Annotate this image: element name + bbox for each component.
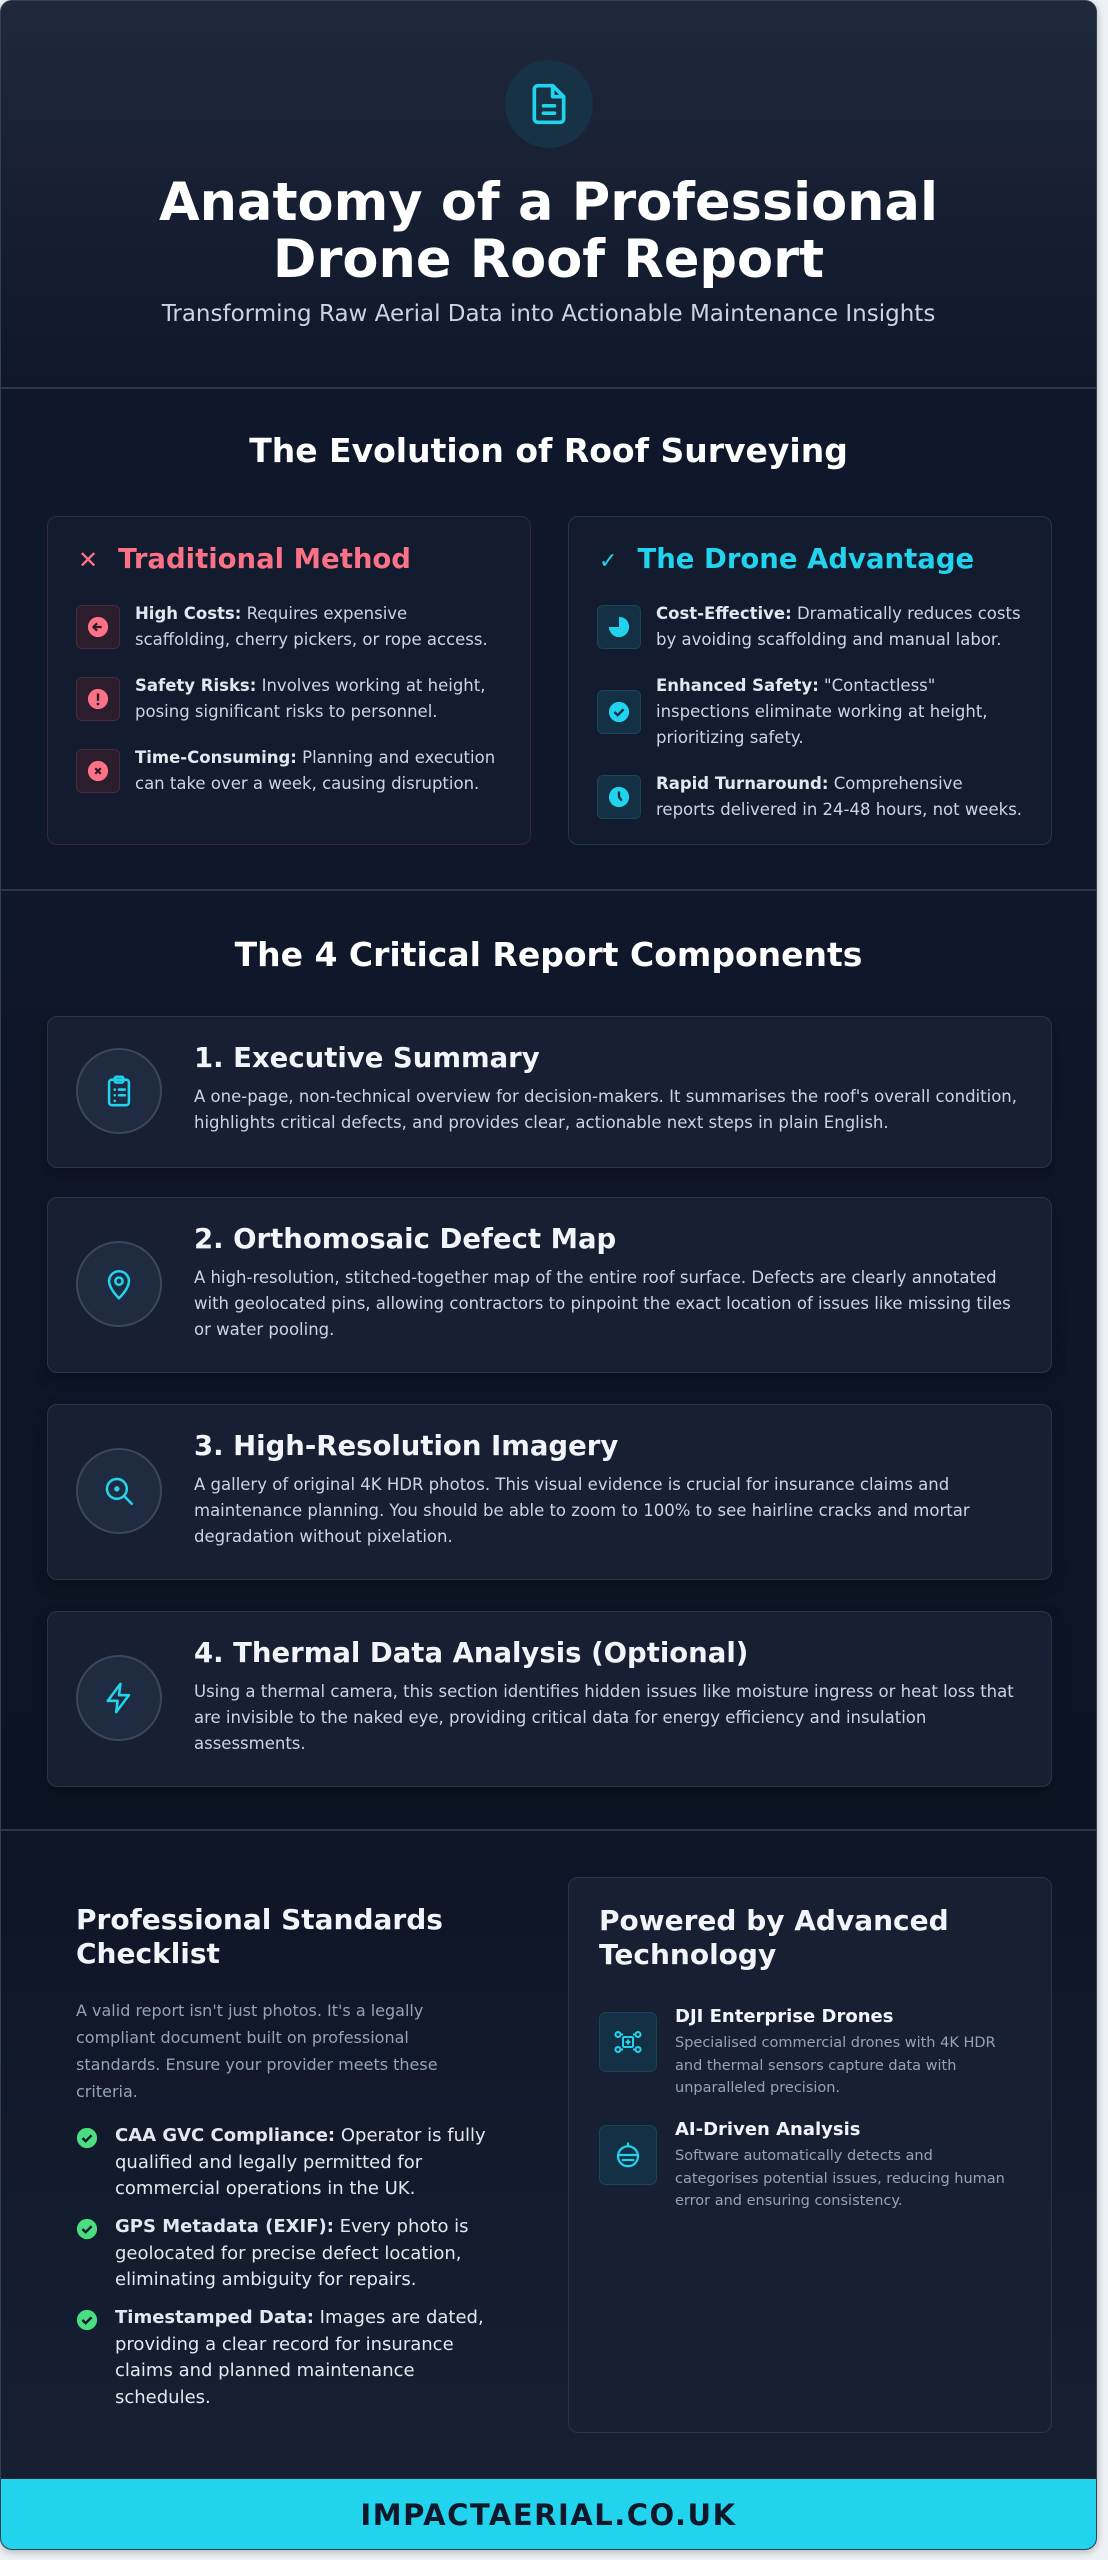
footer [1,2479,1096,2551]
component 3: 3. High-Resolution Imagery [194,1430,618,1462]
item: safety risks: Safety Risks: Involves working at height, posing significant risks to personnel. [135,676,485,721]
component 1 [47,1016,1052,1168]
item: time-consuming: Time-Consuming: Planning and execution can take over a week, causing disruption. [135,748,495,793]
component 3: A gallery of original 4K HDR photos. This visual evidence is crucial for insurance claims and maintenance planning. You should be able to zoom to 100% to see hairline cracks and mortar degradation without pixelation. [194,1475,970,1546]
item: high costs: High Costs: Requires expensive scaffolding, cherry pickers, or rope access. [135,604,488,649]
checklist item 2 [76,2216,469,2290]
item: cost-effective: Cost-Effective: Dramatically reduces costs by avoiding scaffolding and manual labor. [656,604,1021,649]
heading: The 4 Critical Report Components [235,935,862,974]
component 4 [47,1611,1052,1787]
checklist item 3 [76,2307,484,2408]
icon: document [505,60,593,148]
heading: Powered by Advanced Technology [599,1904,949,1971]
component 4: 4. Thermal Data Analysis (Optional) [194,1637,748,1669]
title [159,172,938,290]
component 1: 1. Executive Summary [194,1042,540,1074]
icon: lightning [76,1655,162,1741]
panel: technology: AI-Driven Analysis [675,2119,861,2140]
component 2: A high-resolution, stitched-together map of the entire roof surface. Defects are clearly annotated with geolocated pins, allowing contractors to pinpoint the exact location of issues like missing tiles or water pooling. [194,1268,1011,1339]
panel heading: ✓ The Drone Advantage [599,543,974,575]
icon: clipboard [76,1048,162,1134]
title: Anatomy of a Professional [159,172,938,233]
panel: technology: DJI Enterprise Drones [675,2006,893,2027]
panel: drone advantage [568,516,1052,845]
header [1,1,1096,389]
item: enhanced safety: Enhanced Safety: "Contactless" inspections eliminate working at height, prioritizing safety. [656,676,988,747]
section: standards and technology: CAA GVC Compliance: Operator is fully qualified and legally permitted for commercial operations in the UK. [115,2125,486,2199]
panel heading: ✕ Traditional Method [78,543,411,575]
panel: traditional method [47,516,531,845]
component 1: A one-page, non-technical overview for decision-makers. It summarises the roof's overall condition, highlights critical defects, and provides clear, actionable next steps in plain English. [194,1087,1017,1132]
panel: technology: Software automatically detects and categorises potential issues, reducing human error and ensuring consistency. [675,2148,1005,2209]
section: standards and technology: GPS Metadata (EXIF): Every photo is geolocated for precise defect location, eliminating ambiguity for repairs. [115,2216,469,2290]
panel: technology [568,1877,1052,2433]
component 3 [47,1404,1052,1580]
component 2 [47,1197,1052,1373]
icon: map pin [76,1241,162,1327]
icon: magnifier [76,1448,162,1534]
item: rapid turnaround: Rapid Turnaround: Comprehensive reports delivered in 24-48 hours, not weeks. [656,774,1022,819]
heading: checklist: Professional Standards Checklist [76,1903,443,1970]
section: evolution [1,391,1096,891]
section: standards and technology [1,1833,1096,2479]
component 2: 2. Orthomosaic Defect Map [194,1223,616,1255]
section: components [1,893,1096,1831]
tech item: drones [599,2006,996,2096]
list: drone [597,604,1022,819]
title: Drone Roof Report [273,229,824,290]
checklist item 1 [76,2125,486,2199]
subtitle: Transforming Raw Aerial Data into Actionable Maintenance Insights [162,301,935,327]
intro text: A valid report isn't just photos. It's a legally compliant document built on professional standards. Ensure your provider meets these criteria. [76,2001,438,2101]
heading: The Evolution of Roof Surveying [249,431,848,470]
footer: IMPACTAERIAL.CO.UK [360,2498,737,2532]
panel: technology: Specialised commercial drones with 4K HDR and thermal sensors capture data with unparalleled precision. [675,2035,996,2096]
section: standards and technology: Timestamped Data: Images are dated, providing a clear record for insurance claims and planned maintenance schedules. [115,2307,484,2408]
component 4: Using a thermal camera, this section identifies hidden issues like moisture ingress or heat loss that are invisible to the naked eye, providing critical data for energy efficiency and insulation assessments. [194,1682,1014,1753]
tech item: AI [599,2119,1005,2209]
list: traditional [76,604,495,793]
